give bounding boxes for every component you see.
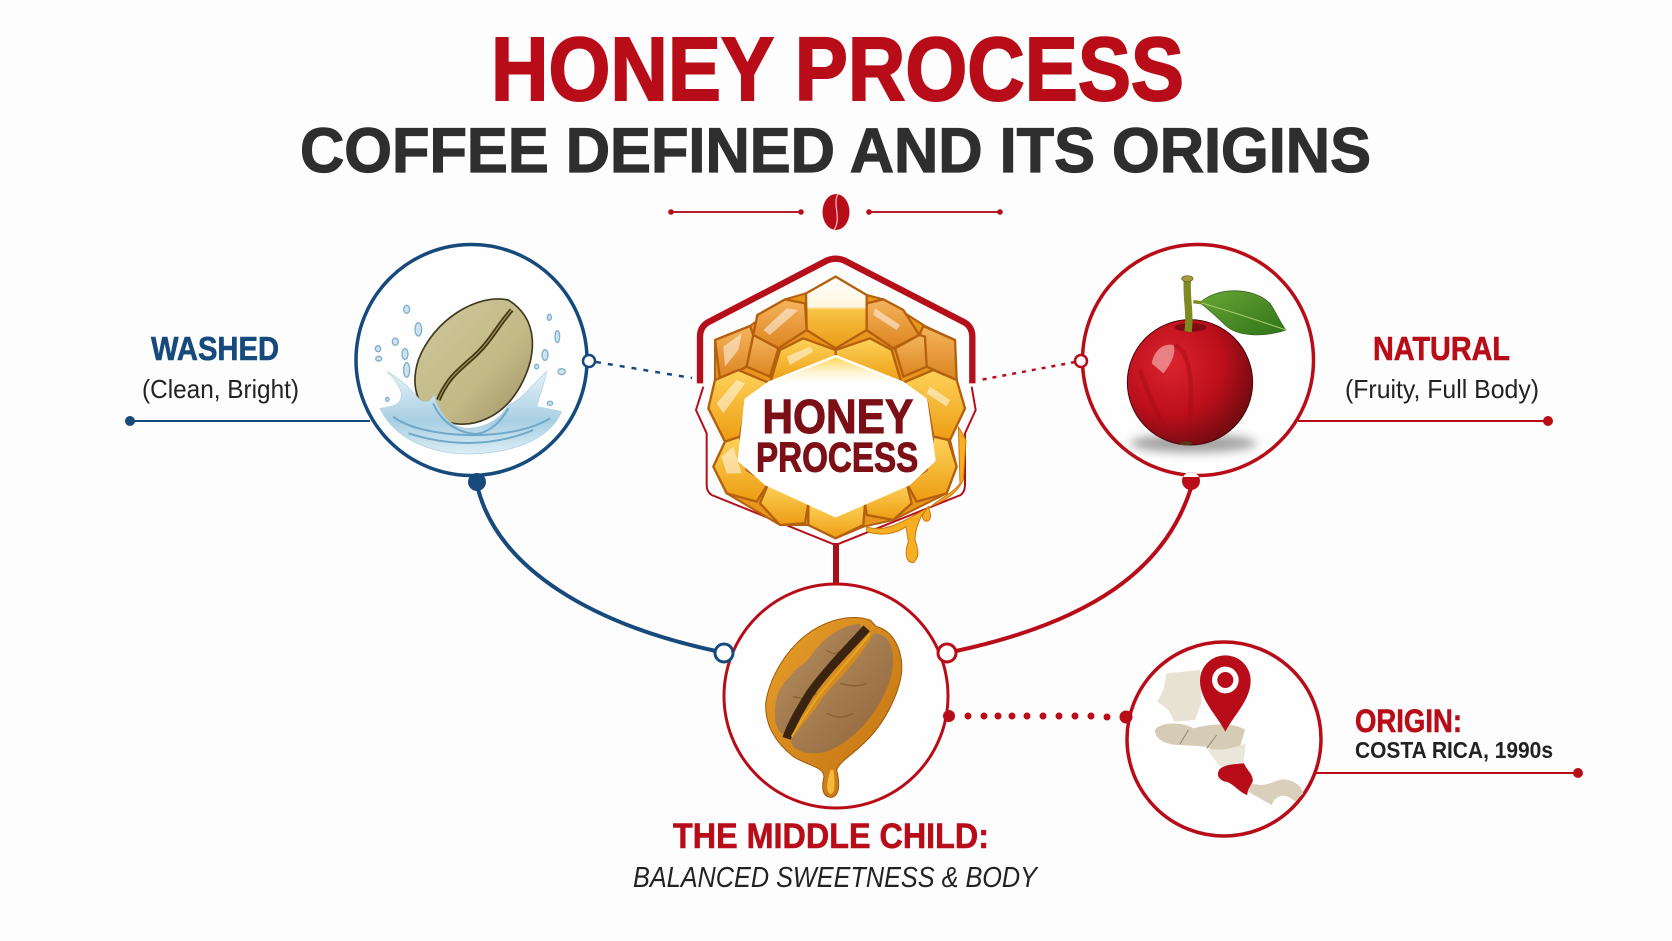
natural label — [1345, 330, 1539, 404]
honey drips — [867, 427, 966, 563]
title: COFFEE DEFINED AND ITS ORIGINS — [300, 116, 1371, 186]
origin label: COSTA RICA, 1990s — [1355, 737, 1553, 763]
connector: middle child to origin dotted — [964, 712, 1110, 720]
center label plate — [740, 357, 933, 515]
middle child label: THE MIDDLE CHILD: — [673, 817, 989, 856]
title: HONEY PROCESS — [491, 20, 1184, 120]
connector: honey to middle child — [833, 543, 839, 586]
center label text: PROCESS — [756, 434, 918, 480]
washed label — [142, 330, 299, 404]
natural nodes — [1075, 355, 1200, 490]
washed circle — [356, 244, 587, 476]
middle child circle — [724, 584, 948, 808]
panel: washed — [125, 244, 595, 491]
panel: origin — [1120, 642, 1583, 836]
natural circle — [1082, 244, 1314, 476]
icon: coffee cherry — [1127, 276, 1286, 453]
panel: honey process hexagon badge — [696, 259, 976, 563]
connector: natural to middle child — [956, 488, 1191, 651]
origin label: ORIGIN: — [1355, 703, 1462, 739]
divider with coffee bean icon — [668, 194, 1003, 230]
washed leader line — [125, 416, 370, 426]
origin label — [1355, 703, 1553, 763]
natural label: (Fruity, Full Body) — [1345, 374, 1539, 404]
honeycomb cells — [708, 277, 965, 538]
panel: middle child — [633, 584, 1039, 894]
natural leader line — [1298, 416, 1553, 426]
connector: washed to honey dashed — [596, 362, 692, 378]
natural label: NATURAL — [1373, 330, 1510, 367]
origin circle — [1127, 642, 1321, 836]
washed label: WASHED — [151, 330, 279, 367]
washed nodes — [468, 355, 595, 491]
origin node — [1120, 710, 1132, 724]
icon: green bean in water splash — [375, 299, 565, 454]
center label text: HONEY — [762, 390, 913, 444]
cell highlights — [717, 308, 950, 473]
panel: natural — [1075, 244, 1553, 490]
icon: central america map with pin — [1155, 655, 1303, 805]
title — [300, 20, 1371, 186]
middle child label: BALANCED SWEETNESS & BODY — [633, 862, 1039, 894]
hexagon frame — [696, 259, 976, 545]
washed label: (Clean, Bright) — [142, 374, 299, 404]
connector: natural to honey dashed — [980, 362, 1075, 380]
middle child label — [633, 817, 1039, 894]
honeycomb backing — [708, 277, 965, 538]
origin leader line — [1316, 768, 1583, 778]
icon: honey coated bean — [766, 618, 902, 797]
connector: washed to middle child — [477, 485, 716, 651]
middle child nodes — [715, 644, 956, 722]
center label text — [756, 390, 918, 480]
